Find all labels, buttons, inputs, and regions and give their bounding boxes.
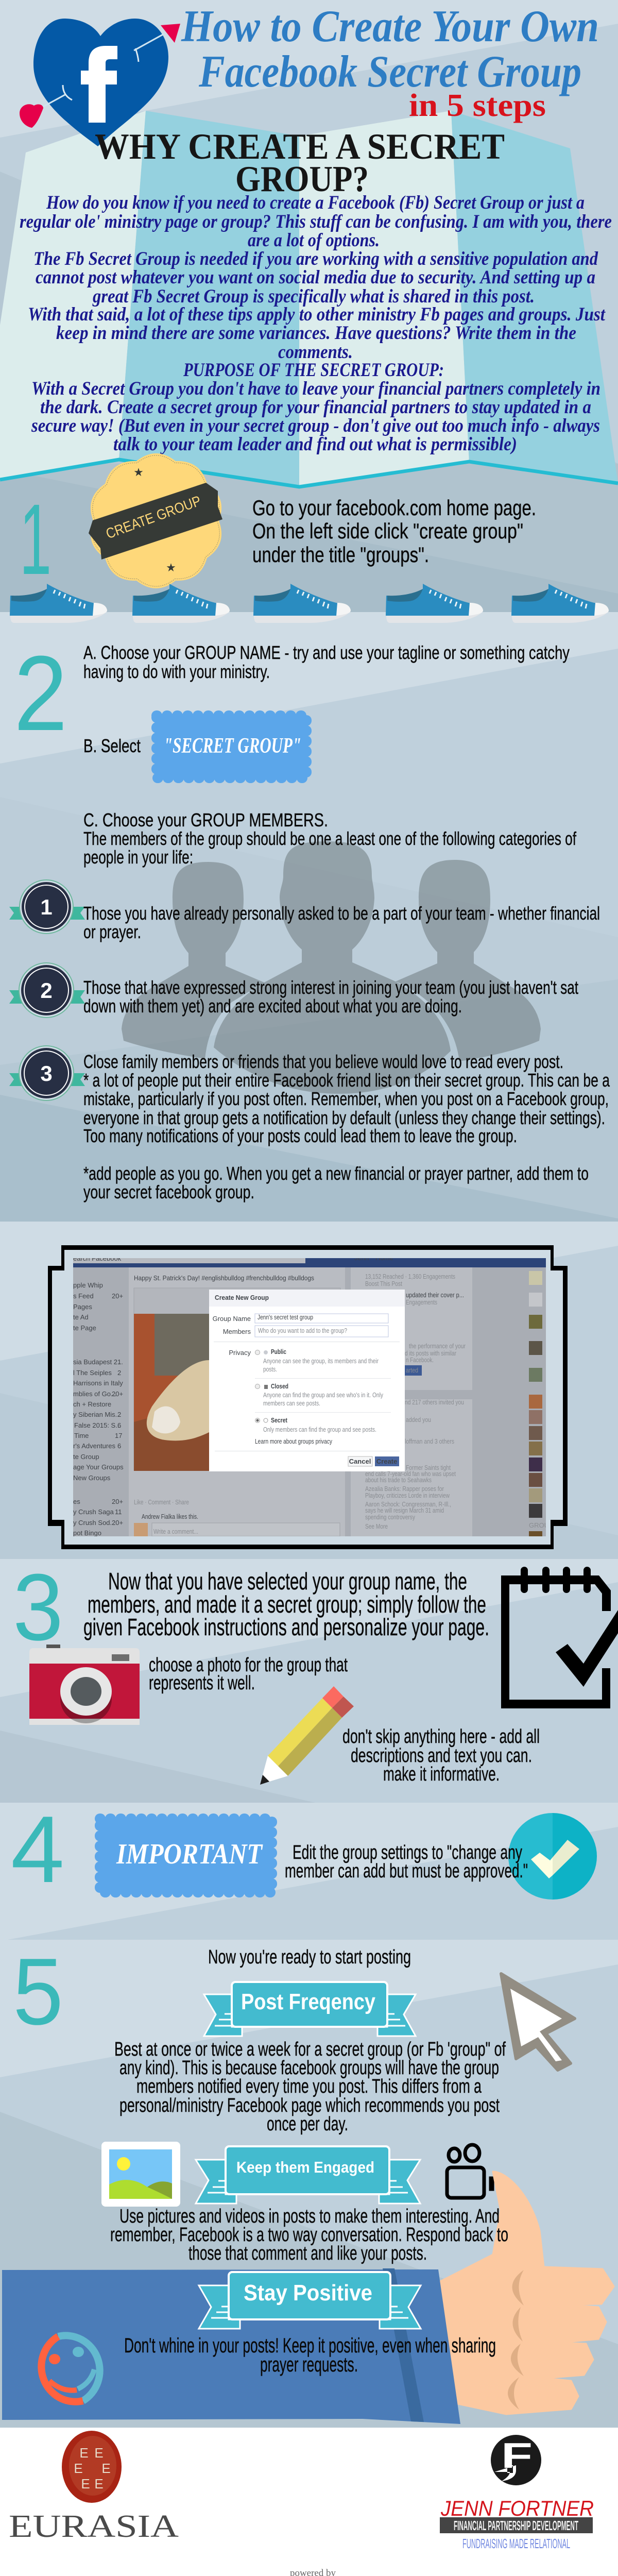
- text block: step 1: [252, 496, 536, 567]
- logo: jenn fortner: JENN FORTNER: [440, 2496, 594, 2520]
- screenshot: friend thumbnails: [529, 1271, 546, 1536]
- screenshot: right column panel: [351, 1267, 472, 1536]
- text block: step 1: under the title "groups".: [252, 543, 429, 567]
- screenshot: right column panel: the performance of your: [409, 1342, 466, 1350]
- text block: step 1: Go to your facebook.com home page.: [252, 496, 536, 520]
- callout: secret group: [157, 716, 306, 778]
- logo: eurasia: E: [74, 2461, 83, 2476]
- icon: picture: [101, 2142, 180, 2207]
- text block: introduction: talk to your team leader and find out what is permissible): [113, 434, 517, 455]
- icon: cursor arrow: [501, 1974, 575, 2070]
- screenshot: right column panel: See More: [365, 1522, 388, 1530]
- screenshot: top navigation bar: [73, 1258, 546, 1267]
- icon: numbered ribbon 3: 3: [40, 1061, 53, 1086]
- panel: open book background: [0, 111, 618, 487]
- logo: eurasia: E: [94, 2445, 104, 2461]
- badge: create group: CREATE GROUP: [104, 493, 203, 542]
- icon: smiley: [41, 2335, 100, 2402]
- step number 2: 2: [14, 634, 67, 753]
- step number 1: 1: [20, 483, 52, 596]
- screenshot: left navigation: 20+: [112, 1390, 123, 1398]
- screenshot: left navigation: Time: [74, 1432, 89, 1439]
- text: step 2 B: B. Select: [83, 735, 141, 756]
- text block: don't skip anything: don't skip anything here - add all: [342, 1726, 540, 1748]
- screenshot: left navigation: l The Seiples: [73, 1369, 112, 1377]
- dialog box: Cancel: [349, 1458, 371, 1465]
- text block: introduction: PURPOSE OF THE SECRET GROUP:: [183, 360, 444, 381]
- badge: create group: [89, 453, 222, 588]
- screenshot: right column panel: about his trade to Seahawks: [365, 1476, 432, 1484]
- title: [181, 2, 599, 97]
- screenshot: right column panel: end calls 7-year-old fan who was upset: [365, 1470, 456, 1478]
- text block: add people note: [83, 1163, 589, 1202]
- screenshot: right column panel: nd 217 others invited you: [405, 1398, 464, 1406]
- icon: thumbs up hand: [439, 2172, 614, 2414]
- icon: numbered ribbon 1: [9, 880, 85, 934]
- text block: step 3 intro: Now that you have selected your group name, the: [108, 1568, 467, 1595]
- text block: post frequency: members notified every time you post. This differs from a: [136, 2076, 482, 2097]
- screenshot: left navigation: te Page: [73, 1324, 96, 1332]
- text block: don't skip anything: [342, 1726, 540, 1785]
- panel: step 4 background: [0, 1803, 618, 1940]
- screenshot: top navigation bar: earch Facebook: [73, 1255, 122, 1262]
- screenshot: top navigation bar: Home: [375, 1254, 393, 1262]
- dialog box: Only members can find the group and see posts.: [263, 1426, 376, 1433]
- panel: step 2 background: [0, 612, 618, 1222]
- screenshot: post panel: Happy St. Patrick's Day! #englishbulldog #frenchbulldog #bulldogs: [134, 1274, 314, 1282]
- text block: stay positive: prayer requests.: [260, 2353, 358, 2376]
- screenshot: right column panel: arted: [406, 1366, 418, 1374]
- callout: important: [100, 1819, 272, 1892]
- screenshot: left navigation: r's Adventures: [73, 1442, 115, 1450]
- screenshot: left navigation: 6: [117, 1442, 121, 1450]
- screenshot: top navigation bar: Jenn: [354, 1254, 369, 1262]
- screenshot: right column panel: spending controversy: [365, 1513, 415, 1521]
- icon: check circle: [508, 1813, 597, 1900]
- dialog box: [209, 1290, 405, 1471]
- logo: jenn fortner: F: [501, 2435, 533, 2476]
- icon: numbered ribbon 1: 1: [40, 895, 53, 919]
- text block: choose a photo: choose a photo for the group that: [149, 1654, 348, 1676]
- screenshot: left navigation: pot Bingo: [73, 1529, 101, 1537]
- text block: post frequency: once per day.: [267, 2113, 348, 2135]
- dialog box: Privacy: [229, 1349, 251, 1357]
- icon: shoe 1: [10, 584, 107, 623]
- step number 4: 4: [11, 1796, 64, 1902]
- screenshot: left navigation: 20+: [112, 1292, 123, 1300]
- screenshot: right column panel: says he will resign March 31 amid: [365, 1506, 444, 1514]
- text block: member category 2: [83, 977, 578, 1016]
- icon: shoe 3: [253, 584, 351, 623]
- text block: member category 1: or prayer.: [83, 921, 141, 942]
- logo: eurasia: E: [81, 2476, 90, 2492]
- dialog box: Create New Group: [215, 1294, 269, 1301]
- icon: numbered ribbon 3: [9, 1046, 85, 1100]
- screenshot: right column panel: Boost This Post: [365, 1280, 402, 1287]
- step number 3: 3: [13, 1554, 63, 1660]
- dialog box: Closed: [271, 1382, 288, 1390]
- badge: create group: ★: [133, 466, 144, 479]
- text block: step 1: On the left side click "create group": [252, 519, 523, 543]
- screenshot: left navigation: False 2015: S...: [74, 1421, 121, 1429]
- subtitle: in 5 steps: in 5 steps: [409, 88, 546, 123]
- text block: choose a photo: represents it well.: [149, 1672, 255, 1694]
- dialog box: Who do you want to add to the group?: [258, 1327, 347, 1334]
- text block: introduction: are a lot of options.: [248, 230, 380, 251]
- icon: group silhouettes: [122, 841, 541, 1094]
- sleeve: [2, 2269, 460, 2424]
- icon: numbered ribbon 2: 2: [40, 978, 53, 1003]
- screenshot: left navigation: mblies of Go...: [73, 1390, 116, 1398]
- screenshot: left navigation: New Groups: [73, 1474, 111, 1482]
- screenshot: left navigation: s Feed: [73, 1292, 94, 1300]
- text block: step 2 A: having to do with your ministry.: [83, 661, 270, 682]
- screenshot: left navigation: y Crush Sod...: [73, 1519, 115, 1527]
- icon: shoe 4: [386, 584, 483, 623]
- text block: post frequency: [114, 2039, 506, 2135]
- panel: screenshot background: [0, 1222, 618, 1559]
- logo: eurasia: E: [101, 2461, 111, 2476]
- text block: step 3 intro: [83, 1568, 489, 1640]
- screenshot: left navigation: 20+: [112, 1519, 123, 1527]
- screenshot: right column panel: Former Saints tight: [406, 1464, 451, 1471]
- screenshot: right column panel: added you: [406, 1416, 431, 1423]
- text block: member category 2: down with them yet) and are excited about what you are doing.: [83, 995, 462, 1016]
- screenshot: left navigation: te Ad: [73, 1313, 89, 1321]
- icon: facebook heart with arrow: [20, 19, 180, 146]
- screenshot: right column panel: d its posts with similar: [405, 1349, 457, 1357]
- text block: don't skip anything: descriptions and text you can.: [351, 1745, 532, 1767]
- callout: important: IMPORTANT: [116, 1838, 263, 1870]
- screenshot: left navigation: Pages: [73, 1303, 92, 1311]
- shoes row: [10, 584, 609, 623]
- icon: video camera: [447, 2145, 493, 2198]
- dialog box: Members: [223, 1328, 251, 1335]
- panel: step 5 background: [0, 1940, 618, 2428]
- text block: keep them engaged: those that comment and like your posts.: [188, 2243, 427, 2264]
- screenshot: left navigation: 17: [115, 1432, 122, 1439]
- panel: screenshot frame: [48, 1245, 568, 1549]
- panel: step 3 background: [0, 1559, 618, 1803]
- ribbon: keep them engaged: [196, 2146, 420, 2204]
- panel: footer: [0, 2428, 618, 2576]
- icon: calendar with check: [501, 1567, 618, 1708]
- text block: member category 3: [83, 1051, 610, 1146]
- screenshot: right column panel: updated their cover p...: [406, 1291, 464, 1299]
- dialog box: Secret: [271, 1416, 288, 1424]
- text block: step 4: Edit the group settings to "change any: [293, 1842, 522, 1863]
- icon: shoe 5: [511, 584, 609, 623]
- icon: numbered ribbon 2: [9, 963, 85, 1018]
- ribbon: keep them engaged: Keep them Engaged: [236, 2158, 374, 2176]
- screenshot: left navigation: [73, 1281, 124, 1537]
- screenshot: right column panel: Aaron Schock: Congressman, R-Ill.,: [365, 1500, 451, 1508]
- dialog box: posts.: [263, 1365, 277, 1373]
- text block: step 2 C: C. Choose your GROUP MEMBERS.: [83, 809, 328, 831]
- ribbon: stay positive: Stay Positive: [244, 2280, 372, 2306]
- logo: eurasia: E: [94, 2476, 104, 2492]
- screenshot: post panel: Andrew Fialka likes this.: [142, 1513, 198, 1520]
- dialog box: Jenn's secret test group: [258, 1313, 313, 1321]
- badge: create group: ★: [166, 562, 176, 574]
- text block: stay positive: [124, 2334, 496, 2376]
- logo: eurasia: E: [79, 2445, 89, 2461]
- screenshot: left navigation: ch + Restore: [73, 1400, 111, 1408]
- text block: don't skip anything: make it informative.: [383, 1764, 500, 1785]
- illustration: blue sleeve with thumb: [2, 2172, 614, 2424]
- ribbon: post frequency: [204, 1982, 416, 2036]
- screenshot: left navigation: 20+: [112, 1498, 123, 1505]
- screenshot: left navigation: Harrisons in Italy: [73, 1379, 123, 1387]
- screenshot: post panel: Like · Comment · Share: [134, 1498, 189, 1506]
- screenshot: right column panel: Engagements: [406, 1298, 437, 1306]
- logo: eurasia: [9, 2431, 179, 2544]
- ribbon: stay positive: [199, 2272, 421, 2329]
- screenshot: left navigation: 2: [117, 1411, 121, 1418]
- screenshot: left navigation: 6: [117, 1421, 121, 1429]
- dialog box: Create: [376, 1458, 397, 1465]
- screenshot: left navigation: pple Whip: [73, 1281, 103, 1289]
- text block: choose a photo: [149, 1654, 348, 1694]
- callout: secret group: "SECRET GROUP": [164, 734, 301, 758]
- panel: header background: [0, 0, 618, 612]
- screenshot: left navigation: y Crush Saga: [73, 1508, 114, 1516]
- icon: pencil: [260, 1686, 354, 1785]
- text block: step 2 C: people in your life:: [83, 846, 193, 868]
- screenshot: right column panel: Playboy, criticizes Lorde in interview: [365, 1492, 450, 1499]
- text block: step 4: [285, 1842, 528, 1882]
- screenshot: left navigation: age Your Groups: [73, 1463, 124, 1471]
- heading: why create a secret group: WHY CREATE A SECRET: [95, 127, 505, 167]
- screenshot: left navigation: 1: [117, 1358, 121, 1366]
- text block: keep them engaged: [110, 2206, 508, 2264]
- heading: why create a secret group: [95, 127, 505, 199]
- logo: jenn fortner: [440, 2435, 594, 2551]
- dialog box: members can see posts.: [263, 1399, 320, 1407]
- screenshot: post panel: [129, 1267, 345, 1536]
- screenshot: left navigation: 11: [115, 1508, 122, 1516]
- screenshot: right column panel: 13,152 Reached · 1,360 Engagements: [365, 1273, 455, 1280]
- screenshot: right column panel: loffman and 3 others: [405, 1437, 454, 1445]
- icon: camera: [29, 1645, 140, 1725]
- dialog box: Group Name: [213, 1315, 251, 1323]
- screenshot: left navigation: te Group: [73, 1453, 99, 1461]
- screenshot: left navigation: y Siberian Mis...: [73, 1411, 121, 1418]
- screenshot: post panel: Write a comment...: [153, 1528, 198, 1535]
- dialog box: Anyone can find the group and see who's in it. Only: [263, 1391, 383, 1399]
- text block: add people note: your secret facebook group.: [83, 1181, 254, 1202]
- text block: introduction: great Fb Secret Group is specifically what is shared in this post.: [92, 286, 535, 307]
- text block: member category 1: [83, 903, 600, 942]
- dialog box: Anyone can see the group, its members and their: [263, 1357, 379, 1365]
- text block: introduction: [20, 192, 612, 455]
- text block: introduction: comments.: [278, 342, 353, 363]
- screenshot: right column panel: n Facebook.: [406, 1356, 434, 1364]
- screenshot: friend thumbnails: GROUP: [529, 1521, 554, 1529]
- screenshot: left navigation: sia Budapest 2...: [73, 1358, 123, 1366]
- dialog box: Learn more about groups privacy: [255, 1437, 332, 1445]
- ribbon: post frequency: Post Freqency: [241, 1989, 375, 2014]
- heading: why create a secret group: GROUP?: [235, 159, 369, 199]
- screenshot: left navigation: 2: [117, 1369, 121, 1377]
- icon: shoe 2: [132, 584, 230, 623]
- text: ready to start posting: Now you're ready to start posting: [208, 1946, 411, 1968]
- dialog box: Public: [271, 1348, 286, 1355]
- text block: step 2 C: [83, 809, 577, 868]
- step number 5: 5: [13, 1938, 63, 2044]
- screenshot: right column panel: Azealia Banks: Rapper poses for: [365, 1485, 444, 1493]
- screenshot: create new group dialog: [73, 1254, 554, 1537]
- screenshot: left navigation: es: [73, 1498, 80, 1505]
- text block: step 2 A: [83, 642, 570, 682]
- logo: eurasia: EURASIA: [9, 2509, 179, 2544]
